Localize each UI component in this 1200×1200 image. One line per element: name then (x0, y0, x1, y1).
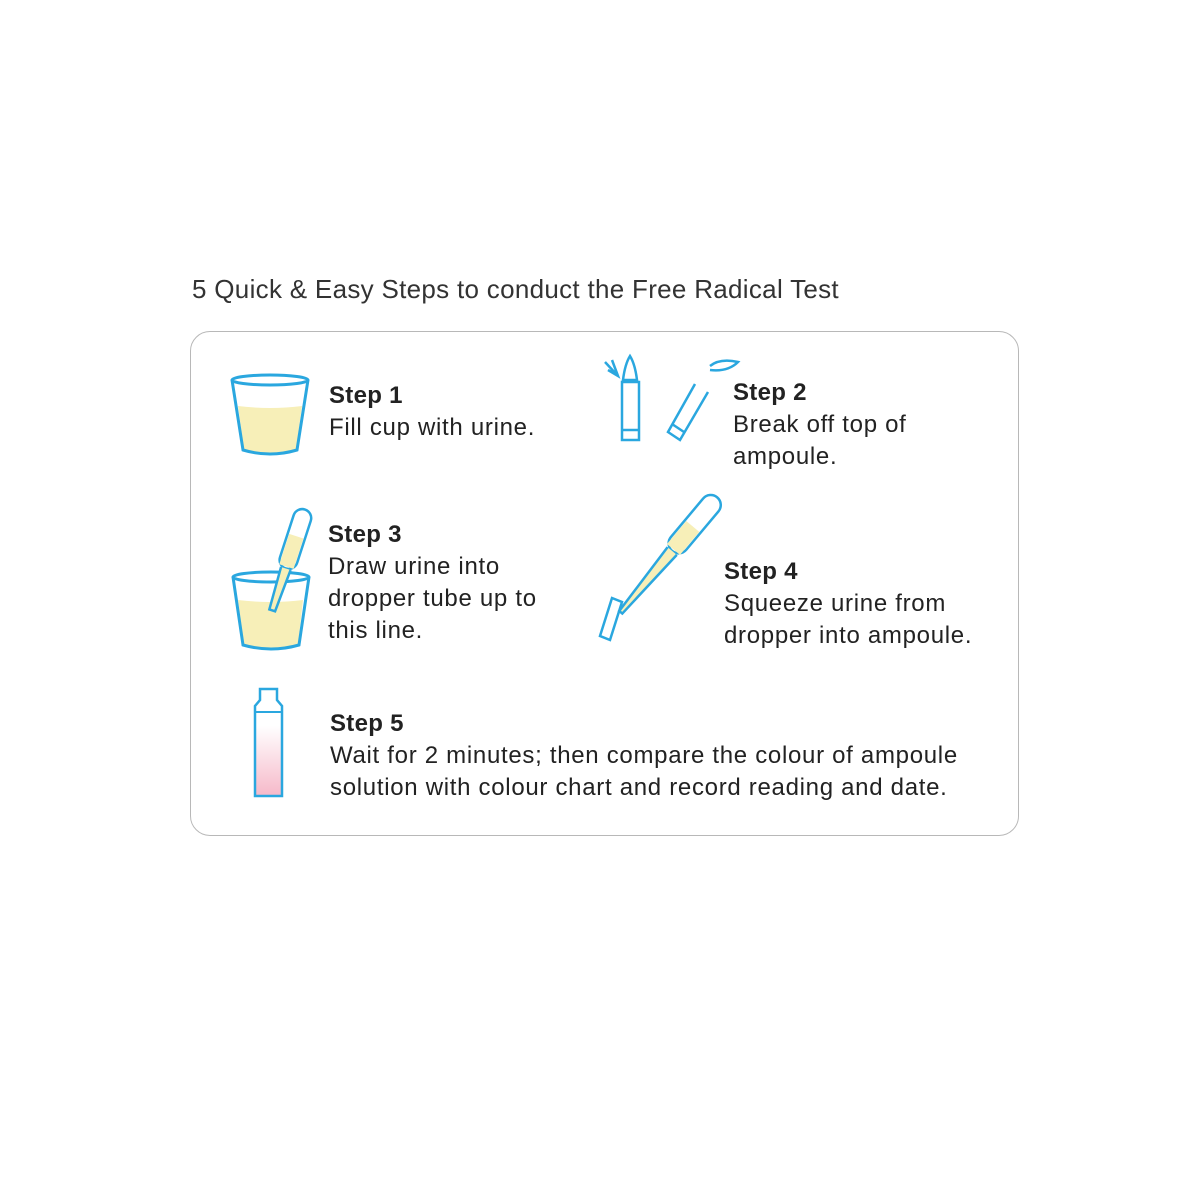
text: step 1 (329, 382, 535, 441)
text: step 4: dropper into ampoule. (724, 622, 972, 649)
text: step 1: Step 1 (329, 382, 403, 409)
text: step 2 (733, 379, 907, 470)
text: step 3: Step 3 (328, 521, 402, 548)
text: step 5: solution with colour chart and record reading and date. (330, 774, 948, 801)
panel: steps (190, 331, 1019, 836)
text: step 4 (724, 558, 972, 649)
icon: dropper into ampoule step 4 (598, 494, 722, 642)
icon: pink ampoule step 5 (254, 688, 284, 798)
icon: cup step 1 (230, 374, 310, 456)
text: step 3: this line. (328, 617, 423, 644)
text: step 2: Break off top of (733, 411, 907, 438)
text: step 4: Squeeze urine from (724, 590, 946, 617)
text: step 4: Step 4 (724, 558, 798, 585)
text: step 3: dropper tube up to (328, 585, 537, 612)
text: step 2: ampoule. (733, 443, 837, 470)
text: step 5: Wait for 2 minutes; then compare the colour of ampoule (330, 742, 958, 769)
text: step 1: Fill cup with urine. (329, 414, 535, 441)
text: step 2: Step 2 (733, 379, 807, 406)
text: step 3 (328, 521, 537, 644)
icon: cup with dropper step 3 (232, 508, 312, 650)
title: 5 Quick & Easy Steps to conduct the Free Radical Test (192, 274, 839, 304)
text: step 5: Step 5 (330, 710, 404, 737)
text: step 3: Draw urine into (328, 553, 500, 580)
text: step 5 (330, 710, 958, 801)
icon: ampoules step 2 (604, 354, 740, 442)
